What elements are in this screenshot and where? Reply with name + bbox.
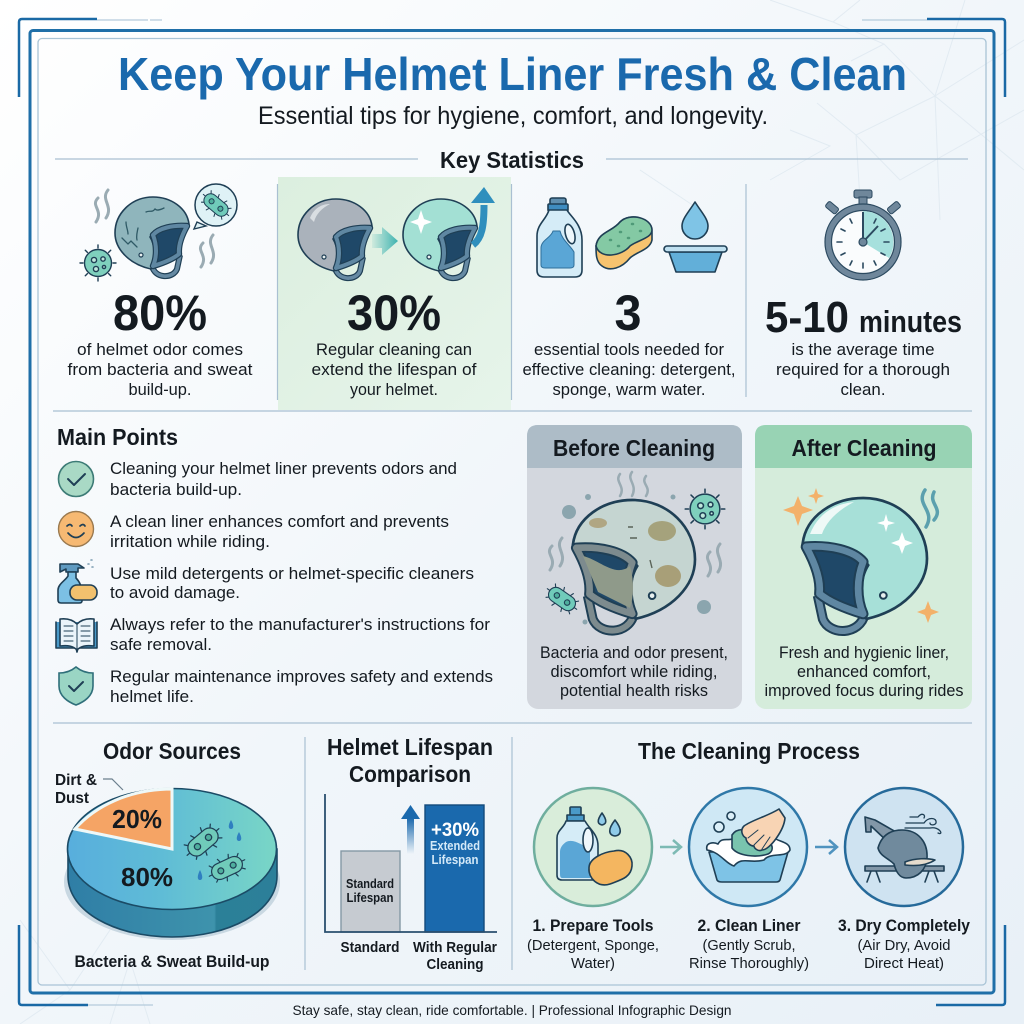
icon: grey helmet to clean helmet with arrow xyxy=(298,187,495,278)
text: point 4 xyxy=(110,616,491,654)
subtitle: Essential tips for hygiene, comfort, and longevity. xyxy=(258,102,768,130)
stat description: your helmet. xyxy=(350,381,438,399)
stat description: extend the lifespan of xyxy=(312,361,477,379)
icon: dirty helmet with bacteria xyxy=(80,184,237,281)
stat number: 30% xyxy=(347,285,441,341)
heading: Comparison xyxy=(349,761,471,787)
stat description: clean. xyxy=(840,381,886,399)
step 1 icon: prepare tools xyxy=(534,788,652,906)
icon: detergent, sponge, water bowl xyxy=(537,198,727,277)
heading: Odor Sources xyxy=(103,738,241,764)
bar chart: Standard xyxy=(340,940,400,956)
panel: helmet lifespan comparison xyxy=(325,734,497,973)
callout: dirt and dust xyxy=(55,772,123,807)
stat description: from bacteria and sweat xyxy=(68,361,253,379)
text: point 3 xyxy=(110,565,474,602)
header: After Cleaning xyxy=(792,435,936,461)
title: Keep Your Helmet Liner Fresh & Clean xyxy=(118,48,907,100)
bar chart: Lifespan xyxy=(346,891,394,905)
pie chart xyxy=(64,788,280,940)
stat description xyxy=(522,341,736,399)
description: Bacteria and odor present, xyxy=(540,644,728,662)
stat description: is the average time xyxy=(792,341,934,359)
stat number: minutes xyxy=(859,304,962,339)
heading: Helmet Lifespan xyxy=(327,734,493,760)
stat description xyxy=(776,341,950,399)
text: point 2 xyxy=(110,513,449,551)
icon: open book xyxy=(56,619,97,652)
text: point 4: Always refer to the manufacturer's instructions for xyxy=(110,616,491,634)
callout: dirt and dust: Dirt & xyxy=(55,772,97,789)
panel: stat 5-10 minutes xyxy=(765,190,962,399)
panel: stat 30% xyxy=(278,177,511,410)
stat number xyxy=(765,293,962,342)
text: point 3: Use mild detergents or helmet-specific cleaners xyxy=(110,565,474,583)
icon: smile xyxy=(58,512,94,546)
text: point 3: to avoid damage. xyxy=(110,584,240,602)
header xyxy=(527,425,742,468)
description xyxy=(764,644,964,700)
callout: dirt and dust: Dust xyxy=(55,790,90,807)
bar chart xyxy=(325,794,497,973)
panel: stat 80% xyxy=(68,184,253,399)
icon: stopwatch xyxy=(825,190,901,280)
footer: Stay safe, stay clean, ride comfortable. | Professional Infographic Design xyxy=(292,1002,732,1018)
step 3 label: 3. Dry Completely xyxy=(838,917,971,935)
icon: spray and sponge xyxy=(58,560,97,603)
step 2 label: Rinse Thoroughly) xyxy=(689,955,809,972)
bar chart: Extended xyxy=(430,839,480,853)
description: potential health risks xyxy=(560,682,708,700)
description: Fresh and hygienic liner, xyxy=(779,644,949,662)
stat description: build-up. xyxy=(128,381,192,399)
stat description xyxy=(312,341,477,399)
step 1 label: (Detergent, Sponge, xyxy=(527,937,659,954)
step 1 label: Water) xyxy=(571,955,615,972)
stat description: essential tools needed for xyxy=(534,341,725,359)
bar chart: Cleaning xyxy=(426,957,484,973)
stat description xyxy=(68,341,253,399)
step 1 label xyxy=(527,917,659,972)
text: point 1: Cleaning your helmet liner prevents odors and xyxy=(110,460,457,478)
stat number: 3 xyxy=(614,285,642,341)
text: point 4: safe removal. xyxy=(110,636,212,654)
icon: check xyxy=(58,462,94,496)
heading: Main Points xyxy=(57,424,178,450)
bar chart: With Regular xyxy=(413,940,497,956)
bar chart: Lifespan xyxy=(432,853,478,867)
heading: The Cleaning Process xyxy=(638,738,860,764)
text: point 1: bacteria build-up. xyxy=(110,481,242,499)
panel: the cleaning process xyxy=(527,738,971,972)
stat description: Regular cleaning can xyxy=(316,341,472,359)
panel: odor sources xyxy=(55,738,280,971)
bar chart: Standard xyxy=(346,877,394,891)
description xyxy=(540,644,728,700)
text: point 2: irritation while riding. xyxy=(110,533,270,551)
header: Before Cleaning xyxy=(553,435,715,461)
text: point 1 xyxy=(110,460,457,499)
step 1 label: 1. Prepare Tools xyxy=(532,917,654,935)
stat description: effective cleaning: detergent, xyxy=(522,361,736,379)
description: enhanced comfort, xyxy=(797,663,931,681)
panel: before cleaning xyxy=(527,425,742,709)
value label: 80% xyxy=(121,862,173,892)
illustration: clean helmet xyxy=(783,488,939,631)
bar chart: +30% xyxy=(431,820,479,841)
stat number: 80% xyxy=(113,285,207,341)
stat description: sponge, warm water. xyxy=(552,381,706,399)
text: point 2: A clean liner enhances comfort and prevents xyxy=(110,513,449,531)
heading: key statistics: Key Statistics xyxy=(440,147,584,173)
icon: shield xyxy=(59,667,93,705)
header xyxy=(755,425,972,468)
text: point 5: helmet life. xyxy=(110,688,194,706)
step 2 label: 2. Clean Liner xyxy=(698,917,801,935)
panel: stat 3 tools xyxy=(522,198,736,399)
panel: after cleaning xyxy=(755,425,972,709)
step 2 label: (Gently Scrub, xyxy=(702,937,796,954)
step 2 label xyxy=(689,917,809,972)
stat description: required for a thorough xyxy=(776,361,950,379)
heading xyxy=(327,734,493,787)
pie caption: Bacteria & Sweat Build-up xyxy=(74,952,270,971)
step 3 label: Direct Heat) xyxy=(864,955,944,972)
step 3 label: (Air Dry, Avoid xyxy=(858,937,950,954)
description: improved focus during rides xyxy=(764,682,964,700)
step 2 icon: clean liner xyxy=(689,788,807,906)
arrow xyxy=(660,840,681,854)
text: point 5: Regular maintenance improves safety and extends xyxy=(110,668,493,686)
illustration: dirty helmet xyxy=(541,472,725,631)
description: discomfort while riding, xyxy=(550,663,718,681)
panel: main points xyxy=(56,424,493,706)
value label: 20% xyxy=(112,804,162,834)
stat description: of helmet odor comes xyxy=(77,341,243,359)
step 3 icon: dry completely xyxy=(845,788,963,906)
step 3 label xyxy=(838,917,971,972)
stat number: 5-10 xyxy=(765,293,849,342)
text: point 5 xyxy=(110,668,493,706)
arrow xyxy=(815,840,837,854)
